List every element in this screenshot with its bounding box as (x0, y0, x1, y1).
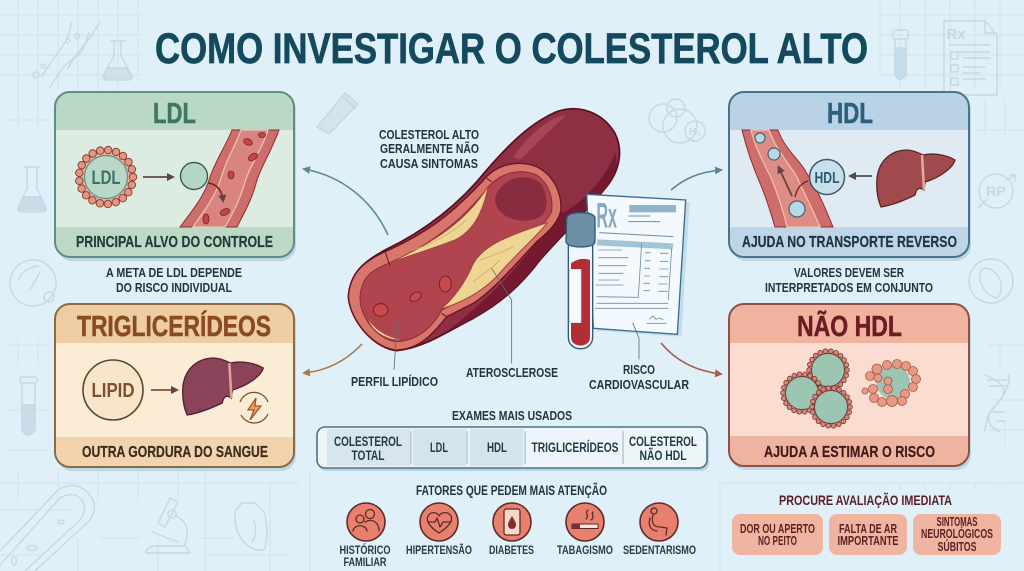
background icon: test tube top right (893, 30, 908, 80)
leader: perfil (394, 320, 397, 370)
label: HDL footer: AJUDA NO TRANSPORTE REVERSO (742, 234, 957, 251)
arrow: HDL in artery (779, 168, 792, 196)
illustration: artery cross-section (348, 109, 690, 370)
leader: aterosclerose (492, 268, 512, 363)
text: sintomas note (379, 127, 479, 171)
icon: HDL particle: HDL (814, 170, 840, 187)
heading: exames: EXAMES MAIS USADOS (452, 408, 572, 423)
badge: sintomas neurológicos: SINTOMAS (936, 515, 978, 529)
background icon: molecule: H₃ (689, 127, 701, 138)
heading: fatores: FATORES QUE PEDEM MAIS ATENÇÃO (416, 483, 607, 498)
text: LDL note: DO RISCO INDIVIDUAL (116, 280, 232, 295)
icon: HDL particle (810, 160, 844, 194)
text: LDL note (106, 265, 242, 295)
background icon: circular arrows (978, 174, 1015, 208)
icon: small LDL (180, 162, 208, 190)
badge: dor no peito (732, 514, 823, 555)
background icon: artery cross section (0, 485, 94, 571)
icon: LDL particles cluster (783, 351, 850, 426)
panel: não HDL (729, 304, 971, 470)
icon: LDL particle (79, 150, 133, 204)
label: triglicerídeos footer: OUTRA GORDURA DO SANGUE (82, 444, 268, 461)
badge: dor no peito: DOR OU APERTO (740, 522, 815, 536)
heading: procure avaliação: PROCURE AVALIAÇÃO IMEDIATA (779, 491, 952, 508)
background icon: microscope (146, 498, 190, 553)
cell: triglicerídeos: TRIGLICERÍDEOS (532, 440, 618, 455)
arrow: LDL into artery (143, 176, 172, 178)
text: HDL note: VALORES DEVEM SER (794, 265, 904, 280)
background icon: flask (103, 41, 132, 80)
badge: dor no peito: NO PEITO (758, 534, 797, 548)
icon: energy cycle (240, 392, 268, 423)
label: LDL footer: PRINCIPAL ALVO DO CONTROLE (76, 234, 273, 251)
badge: falta de ar: IMPORTANTE (838, 534, 898, 548)
heading: HDL: HDL (827, 98, 873, 130)
arrow: to HDL (671, 170, 721, 190)
icon: lab report (587, 194, 690, 337)
heading: triglicerídeos: TRIGLICERÍDEOS (77, 309, 271, 343)
text: sintomas note: CAUSA SINTOMAS (380, 156, 478, 171)
icon: liver (183, 358, 263, 415)
badge: sintomas neurológicos: NEUROLÓGICOS (921, 526, 993, 541)
background icon: heart circle (969, 259, 1013, 303)
title: COMO INVESTIGAR O COLESTEROL ALTO (155, 25, 868, 73)
label: histórico familiar: FAMILIAR (344, 555, 387, 569)
label: risco cardiovascular: RISCO (623, 362, 655, 377)
label: hipertensão: HIPERTENSÃO (406, 542, 472, 557)
badge: sintomas neurológicos (913, 514, 1001, 555)
background icon: circular arrows: RP (986, 183, 1006, 199)
label: risco cardiovascular: CARDIOVASCULAR (589, 377, 689, 392)
label: não HDL footer: AJUDA A ESTIMAR O RISCO (764, 444, 935, 461)
panel: HDL (729, 92, 971, 261)
arrow: to LDL (304, 169, 388, 235)
badge: falta de ar (829, 514, 907, 555)
background icon: artery sketch (33, 22, 100, 88)
badge: sintomas neurológicos: SÚBITOS (938, 539, 976, 554)
text: HDL note (765, 265, 933, 295)
table: exames mais usados (317, 427, 709, 471)
label: histórico familiar (340, 542, 390, 569)
cell: colesterol não HDL (629, 434, 697, 463)
cell: HDL: HDL (487, 440, 507, 455)
icon: liver (877, 150, 955, 207)
icon: lipid droplet: LIPID (92, 380, 134, 402)
panel: triglicerídeos (55, 304, 296, 471)
label: aterosclerose: ATEROSCLEROSE (466, 365, 558, 380)
background icon: test tube left (20, 377, 37, 435)
label: tabagismo: TABAGISMO (557, 543, 613, 557)
leader: risco (633, 323, 639, 359)
cell: colesterol não HDL: NÃO HDL (640, 448, 686, 463)
heading: não HDL: NÃO HDL (797, 309, 902, 343)
background icon: syringe tube (317, 93, 358, 134)
background icon: document (944, 21, 997, 95)
cell: colesterol total: COLESTEROL (334, 434, 402, 449)
text: sintomas note: GERALMENTE NÃO (380, 141, 479, 156)
icon: histórico familiar (347, 503, 385, 541)
icon: lab report: Rx (596, 197, 617, 236)
background icon: gauge (10, 260, 56, 306)
cell: colesterol total: TOTAL (352, 448, 384, 463)
icon: hipertensão (420, 503, 458, 541)
icon: tabagismo (566, 503, 604, 541)
label: histórico familiar: HISTÓRICO (340, 542, 390, 557)
icon: blood tube (566, 213, 595, 349)
background icon: anatomical heart (235, 503, 267, 550)
arrow: liver to HDL (851, 175, 872, 177)
arrow: lipid to liver (151, 389, 176, 391)
label: perfil lipídico: PERFIL LIPÍDICO (351, 374, 438, 389)
arrow: entering wall (208, 183, 223, 200)
label: risco cardiovascular (589, 362, 689, 392)
icon: diabetes (493, 503, 531, 541)
arrow: from wall to HDL (795, 181, 808, 197)
heading: LDL: LDL (153, 98, 196, 130)
background icon: dna (984, 375, 1009, 432)
cell: colesterol não HDL: COLESTEROL (629, 434, 697, 449)
arrow: to não HDL (661, 343, 721, 374)
text: LDL note: A META DE LDL DEPENDE (106, 265, 242, 280)
panel: LDL (55, 92, 296, 261)
cell: colesterol total (334, 434, 402, 463)
text: sintomas note: COLESTEROL ALTO (379, 127, 479, 142)
label: sedentarismo: SEDENTARISMO (623, 543, 696, 557)
icon: lipid droplet (83, 360, 143, 420)
cell: LDL: LDL (430, 440, 448, 455)
badge: falta de ar: FALTA DE AR (839, 522, 897, 536)
background icon: flask left (18, 167, 46, 212)
icon: damaged particle (862, 360, 920, 406)
background icon: document: Rx (946, 26, 966, 43)
text: HDL note: INTERPRETADOS EM CONJUNTO (765, 280, 933, 295)
label: diabetes: DIABETES (489, 543, 534, 557)
icon: LDL particle: LDL (92, 168, 121, 189)
background icon: molecule (649, 99, 705, 143)
arrow: to triglicerídeos (304, 344, 362, 373)
icon: sedentarismo (640, 503, 678, 541)
